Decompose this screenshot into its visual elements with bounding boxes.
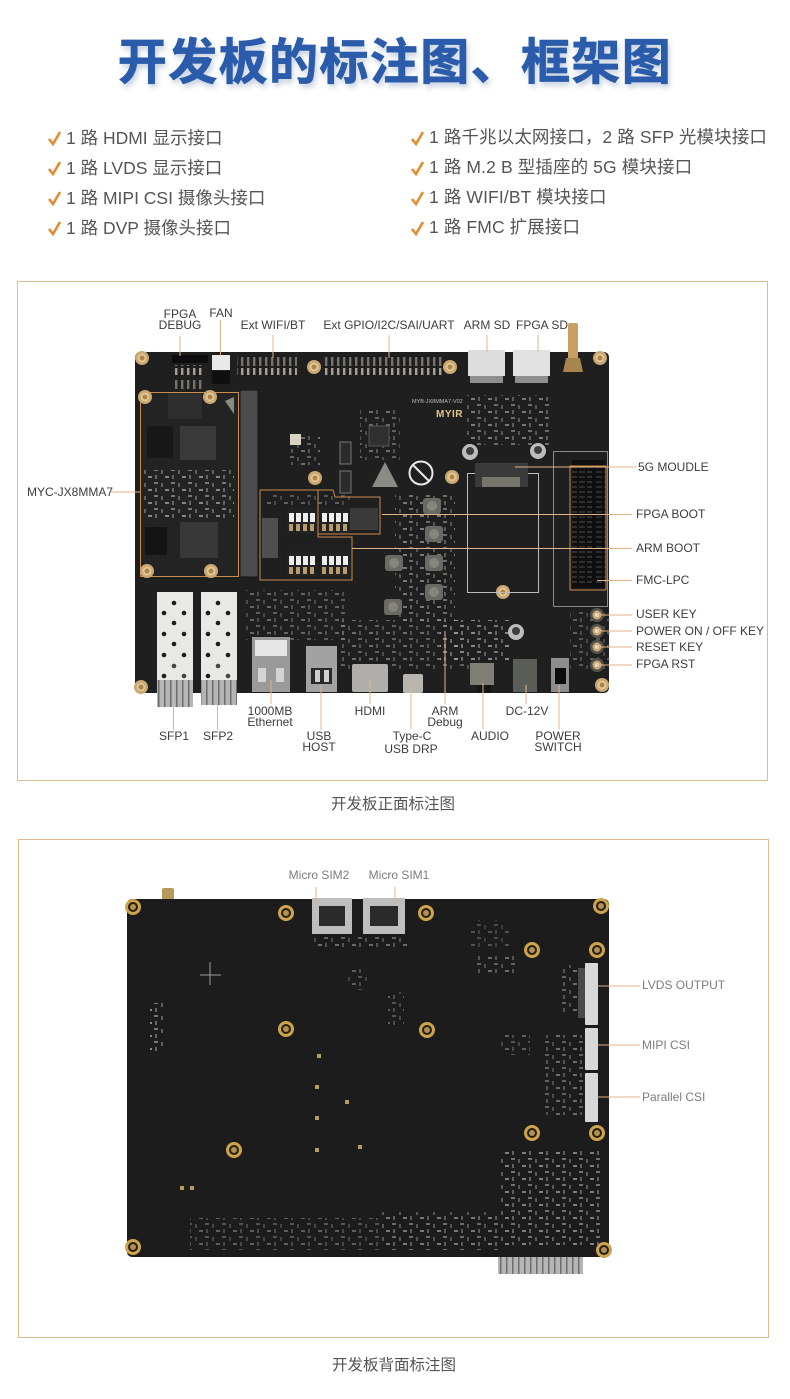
label: FPGA DEBUG: DEBUG (159, 318, 201, 332)
feature list: left column (66, 128, 265, 238)
ESD triangle mark (372, 462, 398, 487)
FPGA SD slot (513, 350, 550, 383)
title: 开发板的标注图、框架图 (118, 23, 672, 94)
label: POWER ON / OFF KEY: POWER ON / OFF KEY (636, 624, 764, 638)
panel frame (18, 282, 768, 780)
fan connector (212, 355, 230, 384)
label: Ext GPIO: Ext GPIO/I2C/SAI/UART (323, 318, 455, 332)
SFP cages behind board (498, 1255, 583, 1274)
label: FPGA BOOT: FPGA BOOT (636, 507, 706, 521)
capacitors (462, 443, 546, 640)
label: LVDS OUTPUT: LVDS OUTPUT (642, 978, 726, 992)
label: Micro SIM1: Micro SIM1 (369, 868, 430, 882)
callout lines: left and right (110, 467, 636, 665)
label: FMC-LPC: FMC-LPC (636, 573, 690, 587)
audio jack (470, 663, 494, 693)
label: Ext WIFI/BT: Ext WIFI/BT (241, 318, 306, 332)
MIPI connector (585, 1028, 598, 1070)
callout lines: bottom (174, 635, 559, 730)
caption: front: 开发板正面标注图 (331, 795, 455, 813)
label: SFP1: SFP1 (159, 729, 189, 743)
power switch (551, 658, 569, 692)
GPIO header (323, 356, 443, 379)
USB host (306, 646, 337, 692)
feature: DVP: 1 路 DVP 摄像头接口 (66, 218, 231, 238)
component clusters (245, 395, 610, 670)
FMC-LPC connector (570, 460, 606, 590)
feature: Ethernet and SFP: 1 路千兆以太网接口，2 路 SFP 光模块接口 (429, 127, 767, 147)
feature: LVDS: 1 路 LVDS 显示接口 (66, 158, 222, 178)
mounting holes (134, 351, 609, 694)
test pads (180, 1054, 362, 1190)
Type-C connector (403, 674, 423, 693)
MYC-JX8MMA7 core module (138, 390, 238, 578)
white LED (290, 434, 301, 445)
PCB (135, 352, 609, 693)
back board (125, 898, 612, 1258)
oscillators (340, 442, 351, 493)
label: FPGA DEBUG: FPGA (164, 307, 196, 321)
label: Type-C USB DRP: Type-C (393, 729, 431, 743)
check icons: left column (49, 132, 60, 234)
mounting holes (125, 898, 612, 1258)
DC-12V jack (513, 659, 537, 692)
front board (134, 323, 610, 707)
label: ARM Debug: ARM (432, 704, 458, 718)
WIFI/BT header (237, 356, 297, 379)
label: POWER SWITCH: POWER (535, 729, 581, 743)
lead-free mark (410, 462, 432, 484)
Parallel CSI connector (585, 1073, 598, 1122)
label: ARM Debug: Debug (427, 715, 463, 729)
panel: front board annotation (18, 282, 768, 780)
caption: back: 开发板背面标注图 (332, 1356, 456, 1374)
label: SFP2: SFP2 (203, 729, 233, 743)
feature list: right column (429, 127, 767, 237)
label: POWER SWITCH: SWITCH (534, 740, 582, 754)
FPGA BOOT outline (318, 490, 380, 534)
board chip (369, 426, 389, 446)
FPGA debug header (172, 355, 208, 389)
SFP1 cage (157, 592, 193, 707)
ARM BOOT outline (260, 490, 352, 580)
LVDS connector (578, 963, 598, 1025)
HDMI connector (352, 664, 388, 692)
label: DC-12V: DC-12V (506, 704, 548, 718)
label: MIPI CSI: MIPI CSI (642, 1038, 690, 1052)
SFP2 cage (201, 592, 237, 705)
5G socket (475, 463, 528, 487)
SIM1 slot (363, 898, 405, 934)
label: RESET KEY: RESET KEY (636, 640, 703, 654)
PCB (127, 899, 609, 1257)
board name: MYB-JX8MMA7-V02 (412, 399, 463, 405)
ARM SD slot (468, 350, 505, 383)
label: HDMI: HDMI (355, 704, 385, 718)
label: USB HOST: HOST (302, 740, 336, 754)
label: 1000MB Ethernet: 1000MB (248, 704, 292, 718)
label: Type-C USB DRP: USB DRP (384, 742, 438, 756)
Ethernet jack (252, 637, 290, 692)
label: ARM SD: ARM SD (464, 318, 511, 332)
SIM2 slot (312, 898, 352, 934)
label: FPGA RST: FPGA RST (636, 657, 696, 671)
component clusters (150, 900, 600, 1250)
DIP switches (262, 508, 378, 577)
FMC outline (554, 452, 608, 606)
panel frame (18, 840, 768, 1338)
user keys (590, 608, 604, 672)
label: ARM BOOT: ARM BOOT (636, 541, 701, 555)
M.2 B slot outline (468, 474, 538, 592)
MYIR logo: MYIR (436, 409, 463, 420)
feature: WIFI/BT: 1 路 WIFI/BT 模块接口 (429, 187, 607, 207)
label: FAN: FAN (209, 306, 233, 320)
label: 1000MB Ethernet: Ethernet (247, 715, 293, 729)
callout lines: back board (316, 887, 640, 1097)
label: MYC-JX8MMA7: MYC-JX8MMA7 (27, 485, 113, 499)
feature: MIPI CSI: 1 路 MIPI CSI 摄像头接口 (66, 188, 265, 208)
feature: HDMI: 1 路 HDMI 显示接口 (66, 128, 223, 148)
feature: FMC: 1 路 FMC 扩展接口 (429, 217, 580, 237)
label: AUDIO: AUDIO (471, 729, 509, 743)
callout lines: top (180, 320, 538, 358)
label: 5G MOUDLE: 5G MOUDLE (638, 460, 709, 474)
crosshair mark (200, 962, 221, 985)
inductors (384, 498, 443, 615)
label: USER KEY: USER KEY (636, 607, 697, 621)
antenna connector (563, 323, 583, 372)
check icons: right column (412, 132, 423, 234)
feature: M.2 5G: 1 路 M.2 B 型插座的 5G 模块接口 (429, 157, 692, 177)
label: Parallel CSI: Parallel CSI (642, 1090, 705, 1104)
M.2 module socket (240, 390, 258, 577)
label: USB HOST: USB (307, 729, 331, 743)
label: FPGA SD: FPGA SD (516, 318, 568, 332)
antenna stub (162, 888, 174, 902)
panel: back board annotation (18, 840, 768, 1338)
label: Micro SIM2: Micro SIM2 (289, 868, 350, 882)
